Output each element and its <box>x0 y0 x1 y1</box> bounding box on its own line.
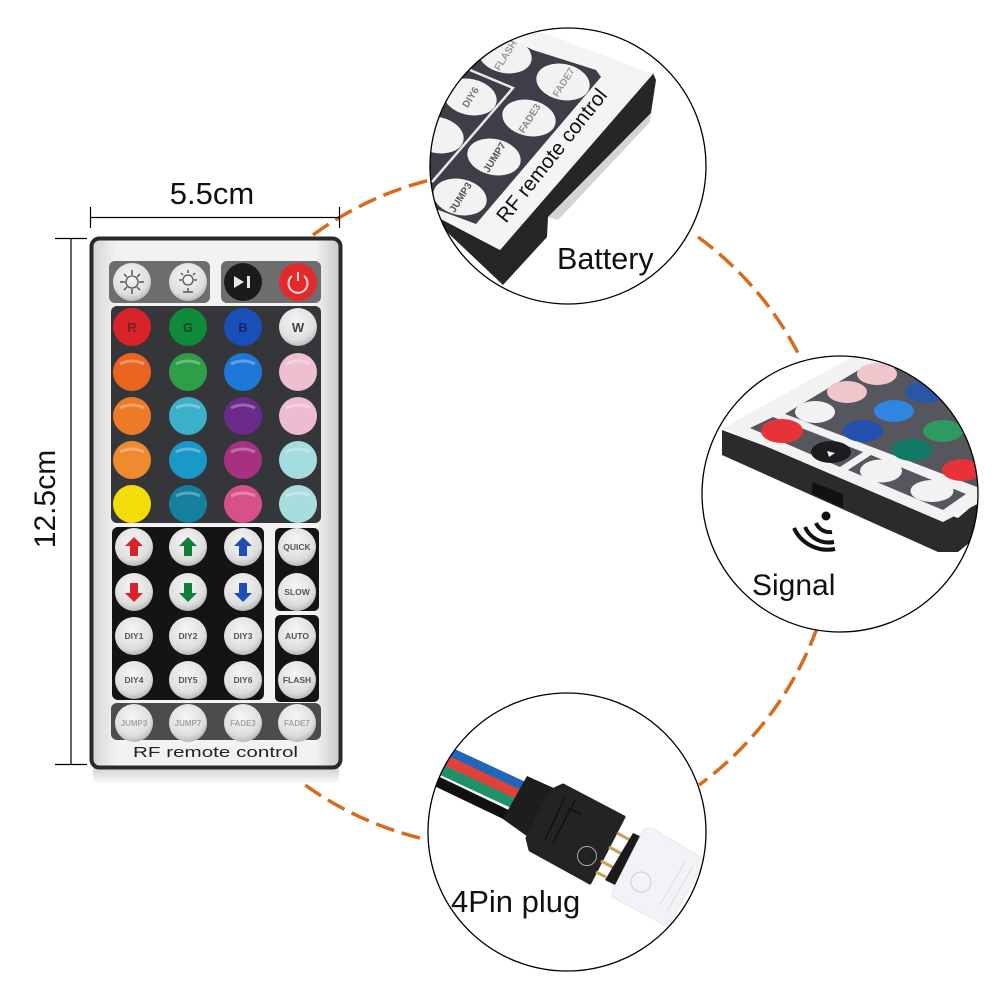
RGB wires <box>436 750 524 820</box>
dark panels <box>785 368 985 490</box>
colour button panel: B <box>238 320 248 335</box>
icon: wireless signal <box>794 512 835 550</box>
remote side edge <box>722 430 985 552</box>
arrow and DIY button panel: DIY5 <box>179 675 198 685</box>
black plug collar <box>503 776 554 836</box>
mode button panel <box>275 615 319 702</box>
circle outline <box>702 356 978 632</box>
arrow and DIY button panel <box>112 527 264 700</box>
black pin socket <box>605 833 642 885</box>
remote body <box>92 238 340 768</box>
colour button panel: W <box>292 320 305 335</box>
top button group <box>109 261 321 303</box>
remote control <box>92 238 340 783</box>
height dimension: 12.5cm: 12.5cm <box>29 450 62 548</box>
remote face <box>723 357 985 522</box>
remote side edge <box>437 73 656 285</box>
detail circle: battery: FADE3 <box>517 102 544 135</box>
dark button panel <box>430 46 601 224</box>
remote face <box>438 32 653 250</box>
detail circle: battery: FADE7 <box>551 66 578 99</box>
width dimension: 5.5cm: 5.5cm <box>170 176 254 211</box>
remote label: RF remote control <box>133 744 298 761</box>
height dimension: 12.5cm <box>29 238 87 764</box>
dashed orange ring connecting the detail circles <box>305 180 817 838</box>
white plug <box>612 828 705 927</box>
label: Battery: Battery <box>557 242 654 276</box>
jump and fade button panel: JUMP3 <box>121 719 148 728</box>
detail circle: battery: JUMP7 <box>482 140 509 175</box>
jump and fade button panel: FADE3 <box>230 719 256 728</box>
reflection under remote <box>93 768 339 783</box>
jump and fade button panel <box>111 703 321 742</box>
mode button panel: FLASH <box>283 675 311 685</box>
label: 4Pin plug: 4Pin plug <box>451 884 580 919</box>
speed button panel: SLOW <box>284 587 311 597</box>
detail circle: signal <box>702 356 985 632</box>
buttons <box>761 419 803 443</box>
arrow and DIY button panel: DIY2 <box>179 631 198 641</box>
detail circle: 4Pin plug <box>415 693 706 971</box>
arrow and DIY button panel: DIY1 <box>125 631 144 641</box>
translucent battery film <box>548 113 651 220</box>
colour button panel: R <box>127 320 137 335</box>
label: Signal: Signal <box>752 569 835 602</box>
circle outline <box>430 28 706 304</box>
jump and fade button panel: JUMP7 <box>175 719 202 728</box>
arrow and DIY button panel: DIY3 <box>234 631 253 641</box>
jump and fade button panel: FADE7 <box>284 719 310 728</box>
black plug body <box>527 785 624 883</box>
colour button panel: G <box>183 320 193 335</box>
width dimension: 5.5cm <box>90 176 340 228</box>
arrow and DIY button panel: DIY6 <box>234 675 253 685</box>
IR window <box>812 482 843 508</box>
speed button panel <box>275 528 319 611</box>
circle outline <box>428 693 706 971</box>
gold pins <box>596 833 630 877</box>
mode button panel: AUTO <box>285 631 309 641</box>
detail circle: battery: DIY6 <box>461 85 482 110</box>
colour button panel <box>111 306 321 523</box>
detail circle: battery <box>407 20 706 304</box>
speed button panel: QUICK <box>283 542 312 552</box>
detail circle: battery: JUMP3 <box>448 180 475 215</box>
detail circle: battery: FLASH <box>493 39 520 73</box>
rotated RF remote control print: RF remote control <box>492 84 612 227</box>
arrow and DIY button panel: DIY4 <box>125 675 144 685</box>
